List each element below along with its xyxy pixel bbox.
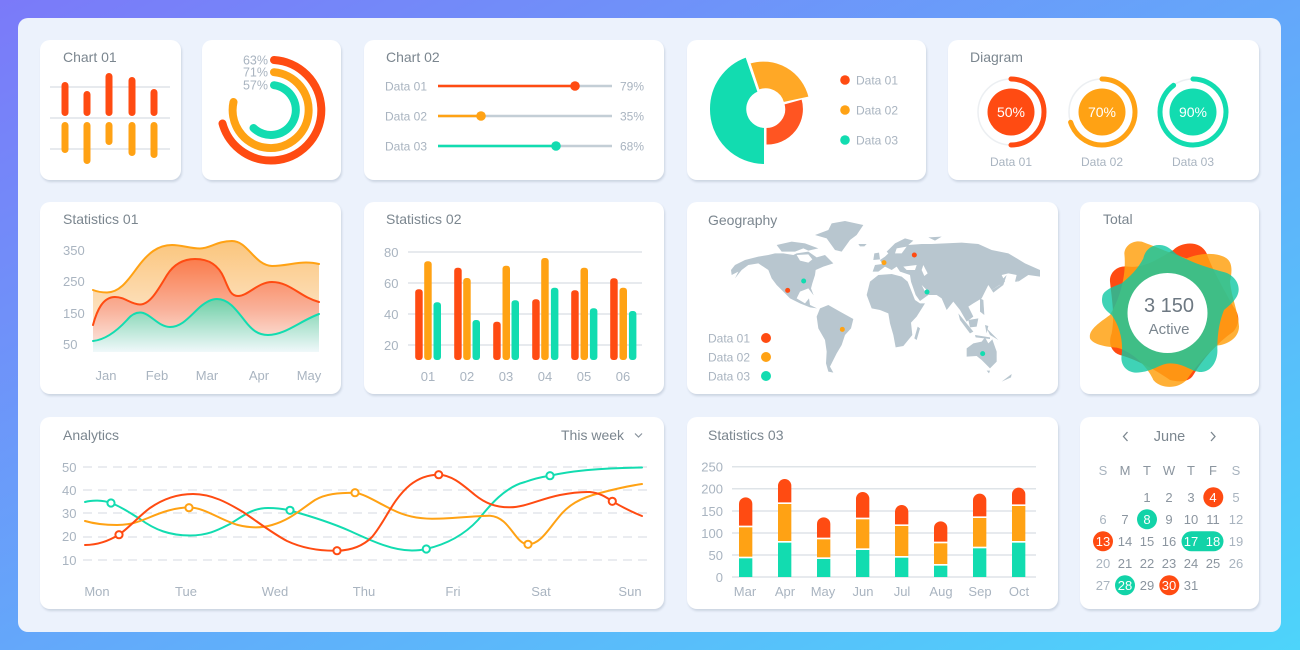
y axis labels [62, 460, 76, 568]
slider: Data 03 [385, 140, 644, 154]
heading: Analytics: Analytics [63, 427, 119, 443]
x axis labels: Mar [196, 368, 219, 383]
donut legend: Data 03 [856, 134, 898, 148]
y axis labels: 50 [709, 548, 723, 563]
date numbers: 10 [1184, 512, 1198, 527]
x axis labels [96, 368, 322, 383]
y axis labels: 10 [62, 553, 76, 568]
x axis labels [734, 584, 1029, 599]
date numbers: 31 [1184, 578, 1198, 593]
panel: Statistics 01 [40, 202, 341, 394]
radial percentages: 71% [243, 66, 268, 80]
date numbers: 11 [1206, 512, 1220, 527]
x axis labels: Fri [445, 584, 461, 599]
date numbers: 13 [1096, 534, 1110, 549]
slider: Data 01: Data 01 [385, 80, 427, 94]
gauge: 90% [1160, 79, 1226, 169]
slider: Data 02: 35% [620, 110, 644, 124]
x axis labels: May [811, 584, 836, 599]
x axis labels: Mon [84, 584, 110, 599]
date numbers: 20 [1096, 556, 1110, 571]
donut legend: Data 02 [856, 104, 898, 118]
date numbers: 8 [1143, 512, 1151, 527]
date numbers: 2 [1165, 490, 1173, 505]
y axis labels: 350 [63, 243, 85, 258]
gauge: 70%: 70% [1088, 104, 1116, 120]
grouped bar chart [408, 252, 642, 360]
gauge: 90%: 90% [1179, 104, 1207, 120]
date numbers: 30 [1162, 578, 1176, 593]
date numbers: 26 [1229, 556, 1243, 571]
heading: Statistics 01: Statistics 01 [63, 211, 139, 227]
y axis labels [701, 460, 723, 585]
donut legend: Data 01 [856, 74, 898, 88]
x axis labels: Sep [968, 584, 992, 599]
weekday labels: M [1120, 463, 1130, 478]
panel: exploded donut [687, 40, 926, 180]
date numbers: 14 [1118, 534, 1132, 549]
x axis labels: Thu [353, 584, 375, 599]
date numbers: 6 [1099, 512, 1107, 527]
gauge: 50% [978, 79, 1044, 169]
y axis labels: 20 [384, 338, 398, 353]
line chart [83, 467, 647, 560]
x axis labels: 03 [499, 369, 513, 384]
heading: Diagram: Diagram [970, 49, 1023, 65]
radial percentages: 57% [243, 78, 268, 92]
x axis labels: Wed [262, 584, 288, 599]
x axis labels: Apr [775, 584, 796, 599]
weekday labels [1099, 463, 1241, 478]
x axis labels: Oct [1009, 584, 1029, 599]
calendar header [1124, 429, 1215, 445]
donut legend [840, 74, 898, 148]
map legend [708, 332, 771, 384]
gauge: 90%: Data 03 [1172, 155, 1214, 169]
gauge: 70%: Data 02 [1081, 155, 1123, 169]
date numbers: 7 [1121, 512, 1129, 527]
area chart [93, 241, 319, 352]
date highlights [1093, 487, 1224, 595]
x axis labels: 04 [538, 369, 552, 384]
slider: Data 03: 68% [620, 140, 644, 154]
y axis labels: 60 [384, 276, 398, 291]
panel: Chart 01 [40, 40, 181, 180]
slider: Data 01 [385, 80, 644, 94]
date numbers [1096, 490, 1243, 593]
date numbers: 27 [1096, 578, 1110, 593]
x axis labels: Jun [853, 584, 873, 599]
y axis labels: 200 [701, 482, 723, 496]
slider: Data 03: Data 03 [385, 140, 427, 154]
y axis labels: 20 [62, 529, 76, 544]
stacked bar chart [732, 467, 1036, 577]
date numbers: 9 [1165, 512, 1173, 527]
date numbers: 3 [1187, 490, 1195, 505]
x axis labels: Sun [618, 584, 642, 599]
panel: Geography [687, 202, 1058, 394]
panel: Total [1080, 202, 1259, 394]
panel: radial progress [202, 40, 341, 180]
date numbers: 16 [1162, 534, 1176, 549]
date numbers: 15 [1140, 534, 1154, 549]
weekday labels: F [1209, 463, 1217, 478]
x axis labels: May [297, 368, 322, 383]
date numbers: 18 [1206, 534, 1220, 549]
y axis labels: 40 [384, 307, 398, 322]
y axis labels: 150 [701, 504, 723, 519]
heading: Statistics 03: Statistics 03 [708, 427, 784, 443]
y axis labels: 50 [63, 337, 77, 352]
date numbers: 22 [1140, 556, 1154, 571]
y axis labels: 80 [384, 245, 398, 260]
panel: Statistics 02 [364, 202, 664, 394]
date numbers: 5 [1232, 490, 1240, 505]
y axis labels: 250 [63, 274, 85, 289]
donut chart [709, 57, 809, 164]
date numbers: 28 [1118, 578, 1132, 593]
radial percentages: 63% [243, 54, 268, 68]
map legend: Data 01 [708, 332, 750, 346]
date numbers: 24 [1184, 556, 1198, 571]
date numbers: 17 [1184, 534, 1198, 549]
slider: Data 02: Data 02 [385, 110, 427, 124]
date numbers: 29 [1140, 578, 1154, 593]
heading: Geography: Geography [708, 212, 777, 228]
vertical bars chart [50, 73, 170, 164]
map legend: Data 03 [708, 370, 750, 384]
weekday labels: T [1143, 463, 1151, 478]
y axis labels: 40 [62, 483, 76, 498]
y axis labels: 50 [62, 460, 76, 475]
panel: Chart 02 [364, 40, 664, 180]
heading: Statistics 02: Statistics 02 [386, 211, 462, 227]
y axis labels: 250 [701, 460, 723, 474]
y axis labels: 100 [701, 526, 723, 541]
x axis labels: 06 [616, 369, 630, 384]
center value: 3 150 [1144, 295, 1194, 317]
x axis labels: Sat [531, 584, 551, 599]
date numbers: 25 [1206, 556, 1220, 571]
x axis labels: Mar [734, 584, 757, 599]
x axis labels: Apr [249, 368, 270, 383]
x axis labels: 05 [577, 369, 591, 384]
x axis labels: Tue [175, 584, 197, 599]
slider: Data 02 [385, 110, 644, 124]
panel: Analytics [40, 417, 664, 609]
radial percentages [243, 54, 268, 92]
heading: Total: Total [1103, 211, 1133, 227]
date numbers: 19 [1229, 534, 1243, 549]
weekday labels: W [1163, 463, 1176, 478]
x axis labels [84, 584, 642, 599]
weekday labels: S [1232, 463, 1241, 478]
map legend: Data 02 [708, 350, 750, 364]
gauge: 50%: Data 01 [990, 155, 1032, 169]
center value [1128, 273, 1208, 353]
y axis labels: 0 [716, 570, 723, 585]
x axis labels: 02 [460, 369, 474, 384]
x axis labels: Jan [96, 368, 116, 383]
panel: Diagram [948, 40, 1259, 180]
gauge: 50%: 50% [997, 104, 1025, 120]
x axis labels: 01 [421, 369, 435, 384]
date numbers: 4 [1209, 490, 1217, 505]
flower blob [1090, 241, 1239, 387]
panel: calendar [1080, 417, 1259, 609]
gauge: 70% [1069, 79, 1135, 169]
dropdown: This week: This week [561, 427, 625, 443]
panel: Statistics 03 [687, 417, 1058, 609]
x axis labels: Aug [929, 584, 953, 599]
y axis labels [63, 243, 85, 352]
radial arcs [222, 60, 321, 161]
y axis labels [384, 245, 398, 353]
x axis labels: Feb [146, 368, 168, 383]
world map [731, 221, 1040, 382]
heading: Chart 01: Chart 01 [63, 49, 117, 65]
weekday labels: S [1099, 463, 1108, 478]
date numbers: 21 [1118, 556, 1132, 571]
x axis labels: Jul [894, 584, 910, 599]
x axis labels [421, 369, 630, 384]
center value: Active [1149, 321, 1189, 338]
slider: Data 01: 79% [620, 80, 644, 94]
date numbers: 1 [1143, 490, 1151, 505]
calendar header: June [1154, 429, 1185, 445]
date numbers: 12 [1229, 512, 1243, 527]
date numbers: 23 [1162, 556, 1176, 571]
y axis labels: 30 [62, 506, 76, 521]
weekday labels: T [1187, 463, 1195, 478]
heading: Chart 02: Chart 02 [386, 49, 440, 65]
y axis labels: 150 [63, 306, 85, 321]
